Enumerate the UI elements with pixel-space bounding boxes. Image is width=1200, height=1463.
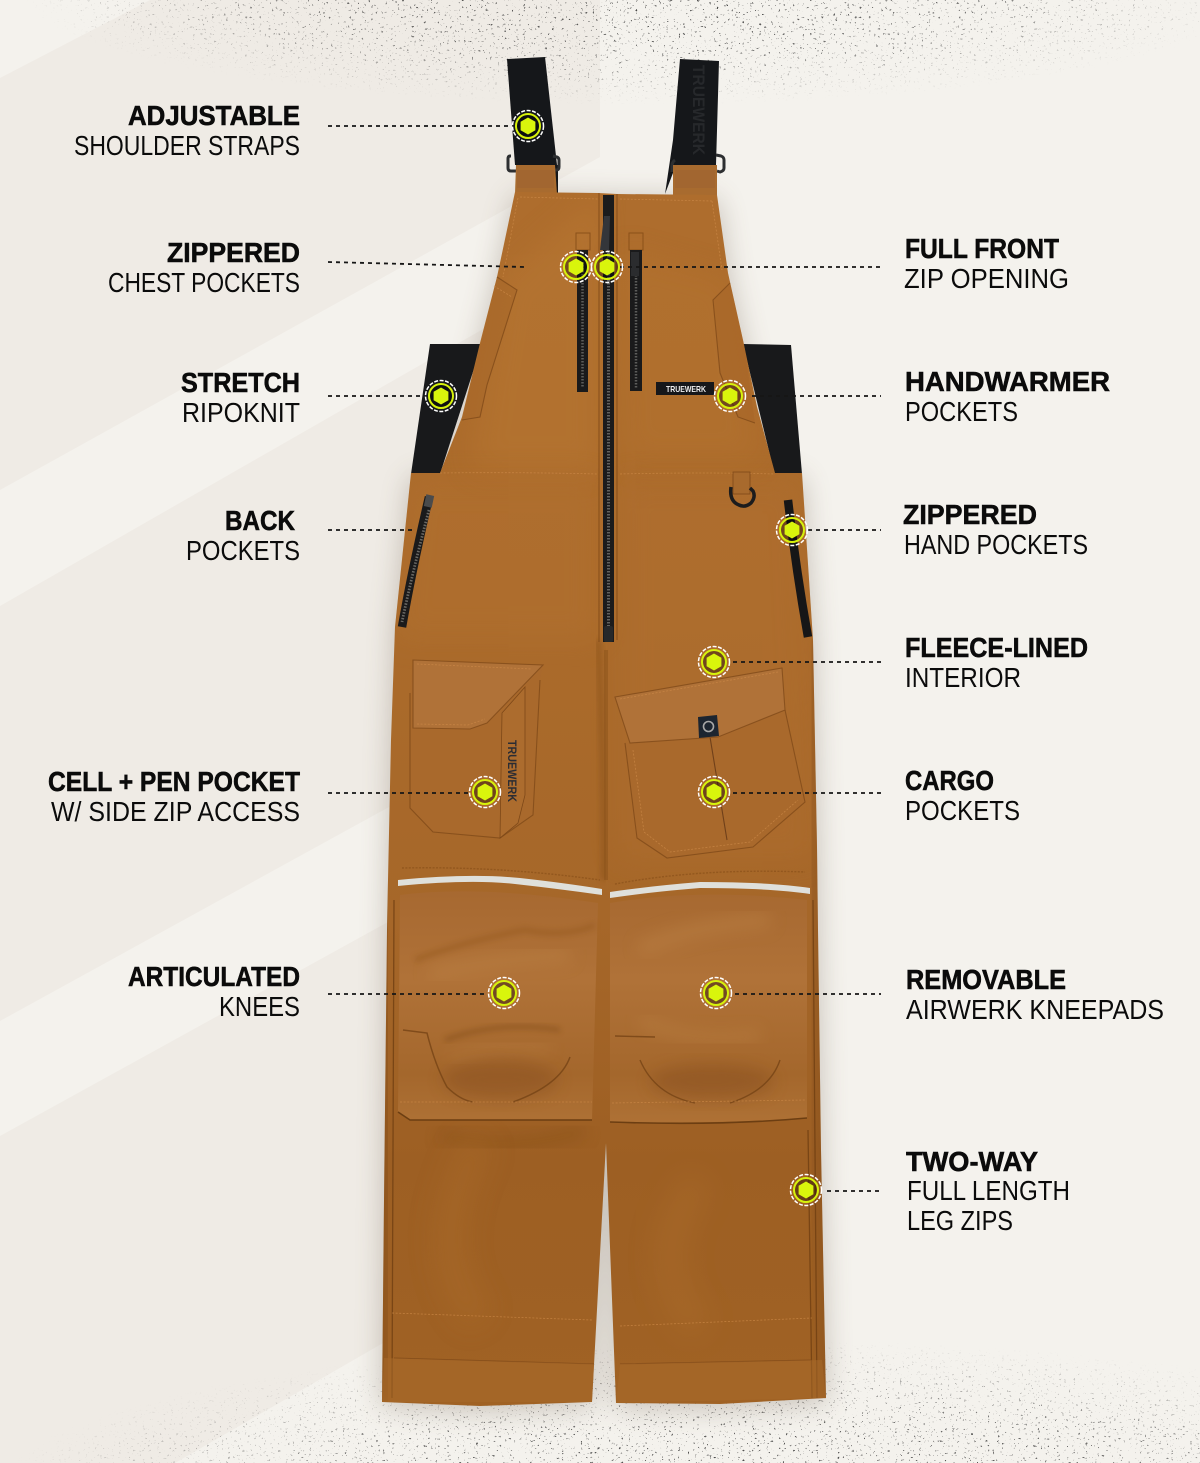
leader line: zippered hand pockets [808, 529, 881, 531]
shoulder strap right: TRUEWERK [689, 65, 708, 156]
label: zippered chest pockets [108, 237, 300, 298]
leader line: full front zip [620, 266, 881, 268]
label: removable airwerk kneepads: AIRWERK KNEEPADS [906, 994, 1164, 1025]
label: cargo pockets: POCKETS [905, 795, 1020, 826]
left knee panel [398, 891, 598, 1120]
hotspot: cell pocket [470, 776, 500, 808]
leader line: adjustable shoulder straps [328, 125, 512, 127]
label: adjustable shoulder straps [74, 100, 300, 161]
hotspot: ripoknit [426, 380, 456, 412]
ripoknit side panel right [743, 344, 802, 476]
chest zipper right [629, 233, 643, 391]
fabric shading [380, 190, 826, 1400]
label: full front zip opening: FULL FRONT [905, 233, 1059, 264]
label: back pockets: BACK [225, 505, 295, 536]
fabric body [382, 192, 826, 1406]
hotspot: front zip [592, 252, 622, 282]
speckle texture bottom [36, 1346, 1200, 1463]
reflective stripe right [610, 882, 810, 898]
hotspot: chest pockets [560, 252, 592, 282]
knee zip seam [402, 868, 805, 884]
handwarmer pocket left [462, 277, 517, 420]
label: removable airwerk kneepads [906, 964, 1164, 1025]
reflective stripe left [398, 876, 602, 895]
label: articulated knees: ARTICULATED [128, 961, 300, 992]
label: fleece-lined interior [905, 632, 1088, 693]
label: two-way full length leg zips: FULL LENGTH [907, 1175, 1070, 1206]
label: adjustable shoulder straps: SHOULDER STRAPS [74, 130, 300, 161]
overalls garment [380, 57, 826, 1406]
pocket tab logo [698, 715, 719, 738]
bib seams [503, 193, 722, 880]
label: stretch ripoknit: STRETCH [181, 367, 300, 398]
label: two-way full length leg zips [906, 1146, 1070, 1236]
hotspot: articulated knee [488, 978, 520, 1008]
label: two-way full length leg zips: TWO-WAY [906, 1146, 1038, 1177]
back pocket zipper [402, 494, 434, 627]
hotspot: leg zip [790, 1174, 822, 1206]
label: full front zip opening: ZIP OPENING [904, 263, 1069, 294]
leader line: back pockets [328, 529, 412, 531]
leader line: cargo pockets [733, 792, 881, 794]
brand label: TRUEWERK [666, 384, 707, 394]
label: back pockets [186, 505, 300, 566]
D-ring [731, 472, 754, 506]
leader line: handwarmer pockets [752, 395, 881, 397]
leader line: two-way leg zips [827, 1190, 881, 1192]
hotspot: cargo pocket [698, 776, 730, 808]
shoulder strap left [507, 57, 559, 193]
left cargo pocket [410, 660, 543, 838]
label: articulated knees: KNEES [219, 991, 300, 1022]
label: cargo pockets [905, 765, 1020, 826]
label: zippered chest pockets: ZIPPERED [167, 237, 300, 268]
right knee panel [610, 895, 807, 1123]
waist seam [440, 473, 775, 474]
ripoknit side panel left [411, 344, 482, 474]
hem stitching [382, 1313, 826, 1403]
leader line: cell and pen pocket [328, 792, 470, 794]
label: handwarmer pockets: POCKETS [905, 396, 1018, 427]
label: handwarmer pockets [905, 366, 1110, 427]
hotspot: fleece lining [698, 646, 730, 678]
leader line: zippered chest pockets [328, 262, 524, 267]
label: adjustable shoulder straps: ADJUSTABLE [128, 100, 300, 131]
speckle texture top [42, 0, 1199, 102]
label: zippered hand pockets: HAND POCKETS [904, 529, 1088, 560]
handwarmer pocket right [713, 283, 755, 423]
label: stretch ripoknit: RIPOKNIT [182, 397, 300, 428]
label: cell and pen pocket: CELL + PEN POCKET [48, 766, 300, 797]
label: cargo pockets: CARGO [905, 765, 994, 796]
label: full front zip opening [904, 233, 1069, 294]
label: fleece-lined interior: FLEECE-LINED [905, 632, 1088, 663]
brand label [656, 382, 714, 395]
hotspot: kneepad [700, 978, 732, 1008]
hotspot: handwarmer [714, 380, 746, 412]
label: cell and pen pocket: W/ SIDE ZIP ACCESS [51, 796, 300, 827]
label: zippered hand pockets: ZIPPERED [903, 499, 1037, 530]
hand pocket zipper [788, 500, 808, 637]
cargo pocket brand text: TRUEWERK [505, 740, 517, 803]
label: removable airwerk kneepads: REMOVABLE [906, 964, 1066, 995]
hotspot: hand pockets [776, 514, 808, 546]
leader line: articulated knees [328, 993, 488, 995]
strap tabs [515, 165, 717, 196]
label: articulated knees [128, 961, 300, 1022]
label: stretch ripoknit [181, 367, 300, 428]
main front zipper [600, 195, 614, 642]
label: two-way full length leg zips: LEG ZIPS [907, 1205, 1013, 1236]
leader line: removable kneepads [735, 993, 881, 995]
leader line: fleece-lined interior [733, 661, 881, 663]
chest zipper left [576, 233, 590, 392]
label: cell and pen pocket [48, 766, 300, 827]
garment shadow [382, 196, 826, 1410]
shoulder strap right [665, 59, 724, 194]
leader line: stretch ripoknit [328, 395, 424, 397]
label: zippered chest pockets: CHEST POCKETS [108, 267, 300, 298]
label: back pockets: POCKETS [186, 535, 300, 566]
label: fleece-lined interior: INTERIOR [905, 662, 1021, 693]
side leg zips [392, 900, 817, 1398]
hotspot: shoulder straps [512, 110, 544, 142]
label: handwarmer pockets: HANDWARMER [905, 366, 1110, 397]
right cargo pocket [615, 668, 805, 858]
label: zippered hand pockets [903, 499, 1088, 560]
